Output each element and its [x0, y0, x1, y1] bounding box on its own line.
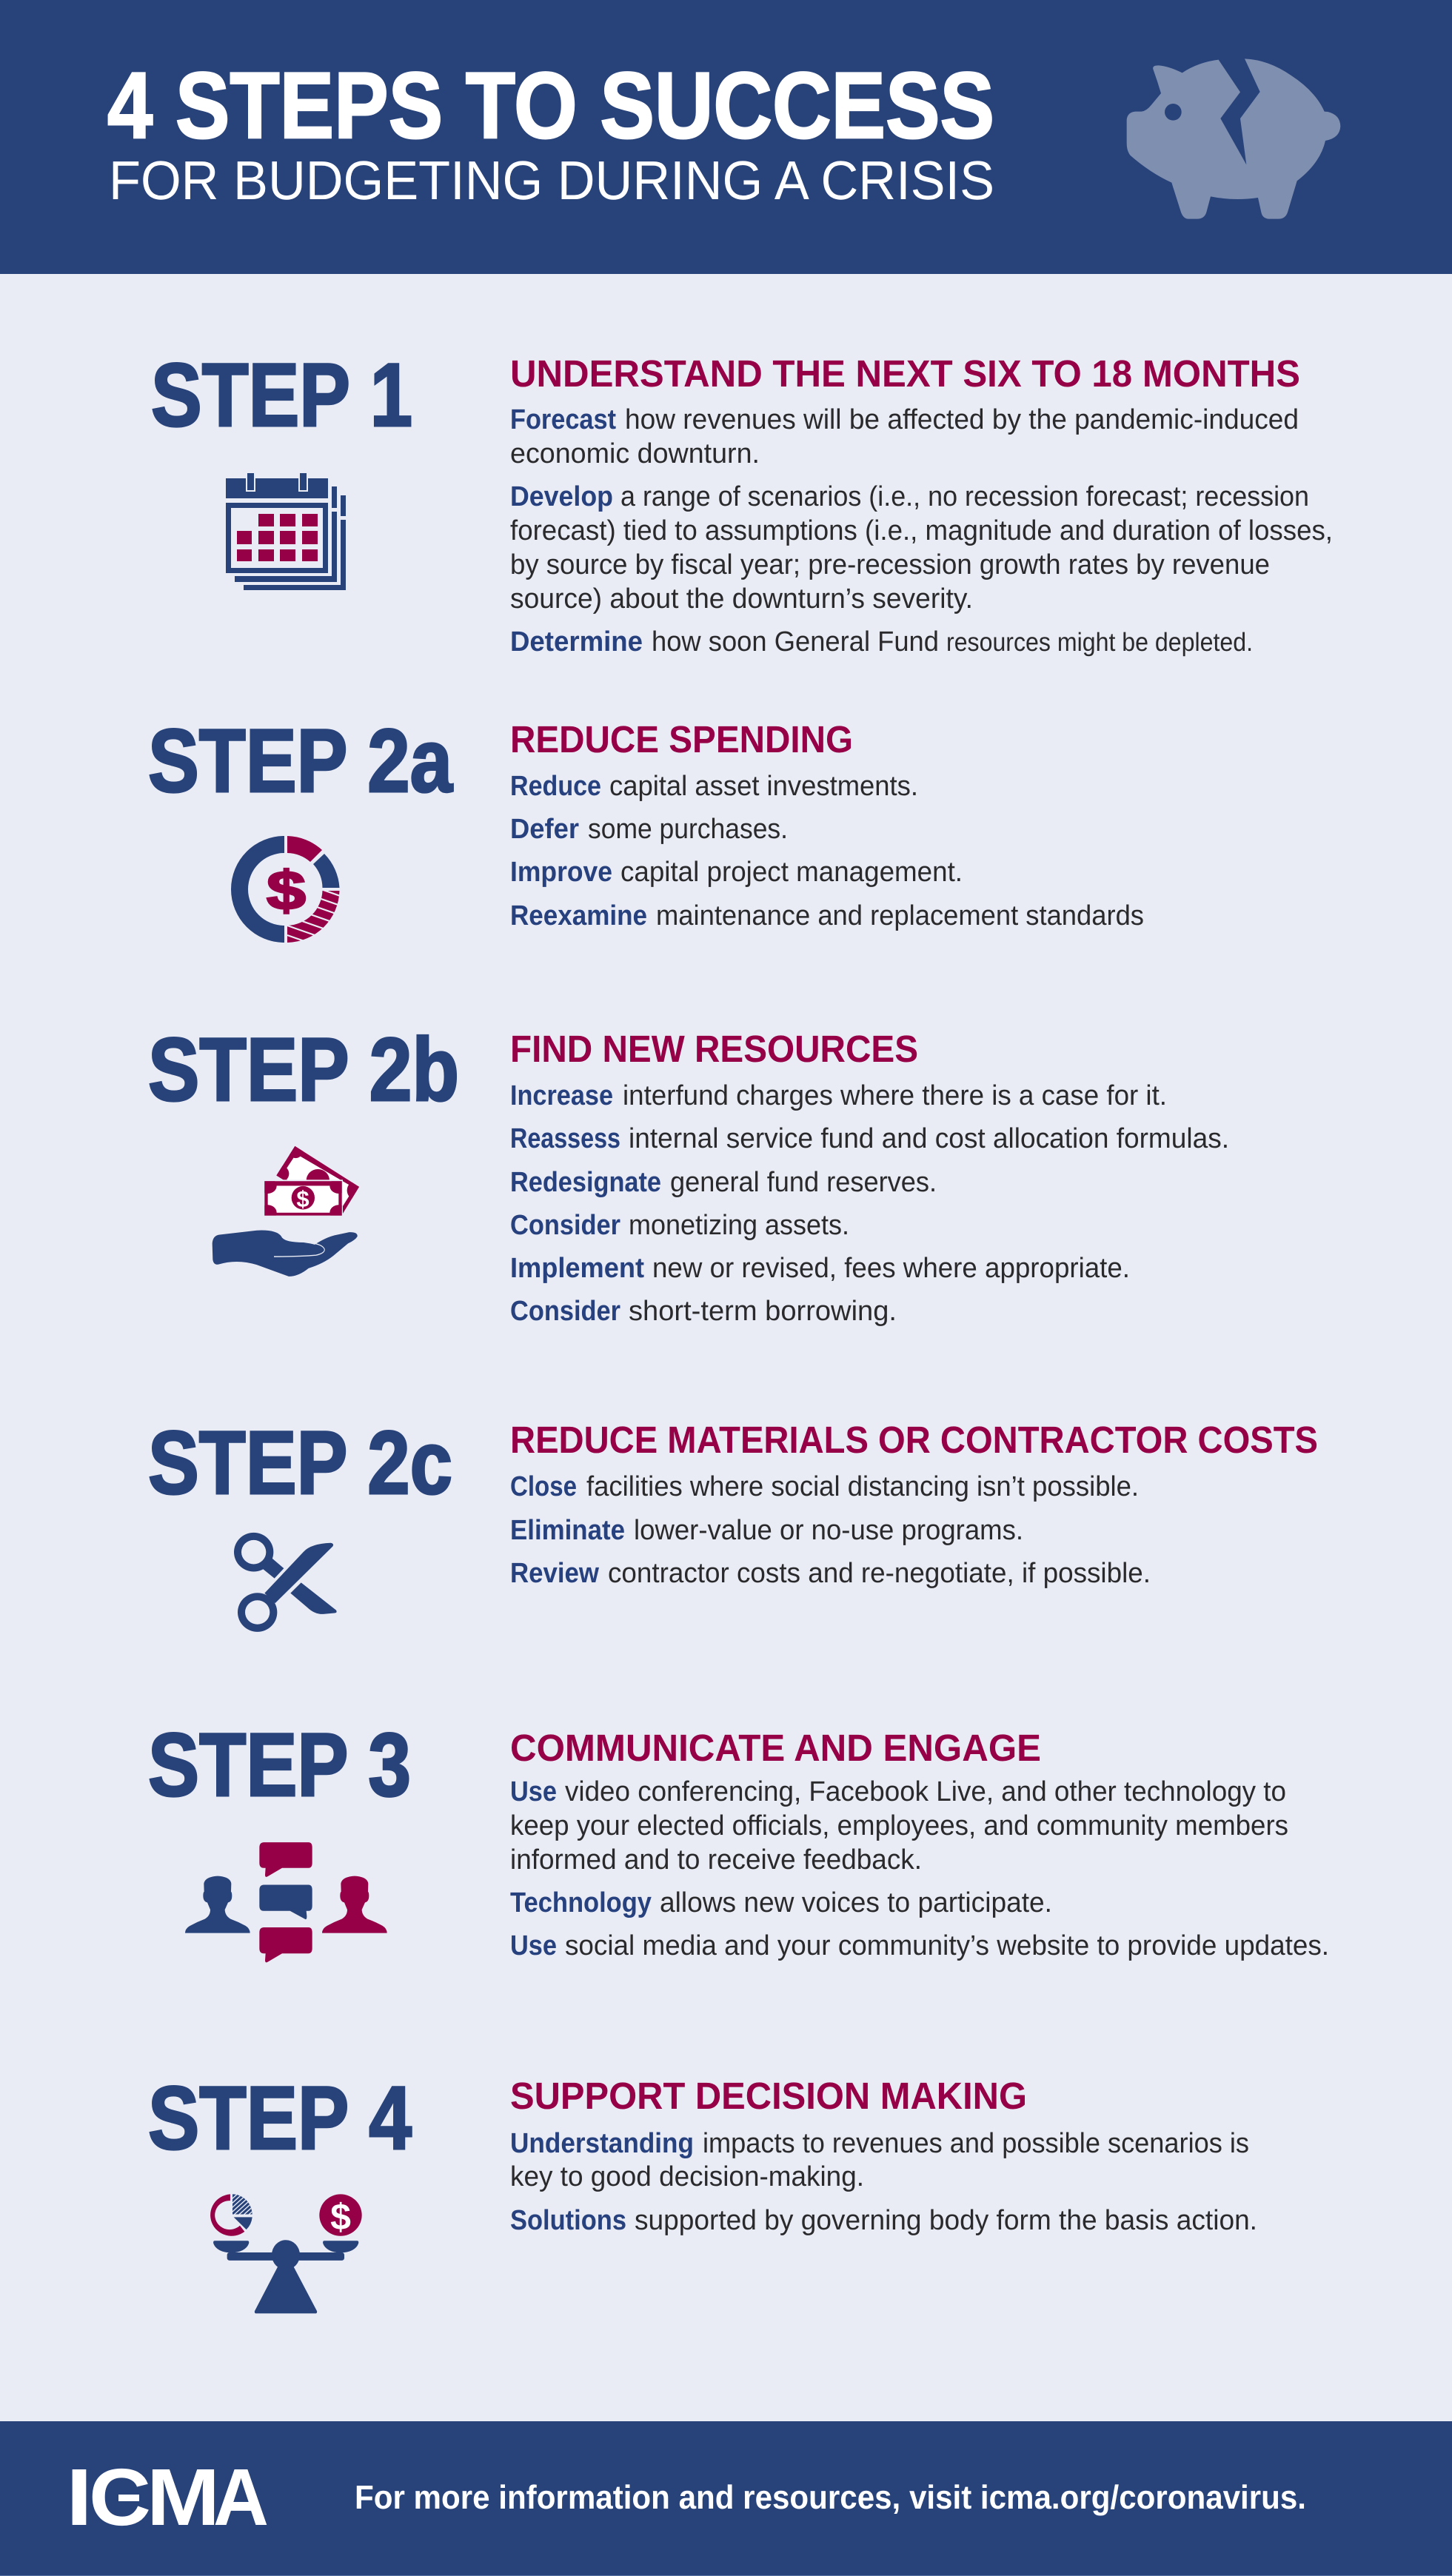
step 1 body text: by source by fiscal year; pre-recession growth rates by revenue — [510, 549, 1270, 581]
ICMA logo: I — [66, 2452, 93, 2543]
header banner — [0, 0, 1452, 274]
step 1 body text: resources might be depleted. — [946, 628, 1253, 657]
step 2b body text: Increase — [510, 1080, 613, 1111]
step 1 heading: UNDERSTAND THE NEXT SIX TO 18 MONTHS — [510, 352, 1300, 395]
panel: step 2c — [148, 1412, 1318, 1632]
step 2c body text: Close — [510, 1471, 577, 1502]
step 2b body text: internal service fund and cost allocation formulas. — [629, 1123, 1229, 1154]
step 2a body text — [510, 771, 1144, 931]
step 3 body text: Technology — [510, 1887, 652, 1918]
panel: step 2b — [148, 1019, 1229, 1327]
step 1 body text: how soon General Fund — [652, 626, 939, 658]
icon: dollar on scale: $ — [330, 2196, 351, 2238]
step 1 body text: Determine — [510, 626, 643, 658]
step 4 label: STEP 4 — [148, 2067, 412, 2168]
step 4 body text: Understanding — [510, 2128, 694, 2159]
step 2a body text: maintenance and replacement standards — [656, 900, 1144, 931]
step 4 body text: supported by governing body form the basis action. — [635, 2205, 1257, 2236]
icon: two people and speech bubbles — [185, 1842, 387, 1962]
step 2b body text: Consider — [510, 1296, 620, 1327]
step 2c body text: Eliminate — [510, 1515, 625, 1546]
step 2c body text — [510, 1471, 1151, 1589]
subtitle: FOR BUDGETING DURING A CRISIS — [109, 150, 994, 211]
icon: broken piggy bank — [1127, 58, 1340, 219]
step 1 body text: a range of scenarios (i.e., no recession forecast; recession — [620, 481, 1309, 512]
step 3 body text: informed and to receive feedback. — [510, 1844, 922, 1876]
step 4 body text: Solutions — [510, 2205, 626, 2236]
step 2b body text: Implement — [510, 1253, 644, 1284]
step 4 body text: impacts to revenues and possible scenarios is — [703, 2128, 1249, 2159]
step 1 body text: economic downturn. — [510, 438, 760, 469]
step 1 body text: source) about the downturn’s severity. — [510, 583, 973, 615]
step 2b body text: Consider — [510, 1210, 620, 1241]
icon: budget donut with dollar: $ — [267, 860, 306, 921]
step 2a body text: Reexamine — [510, 900, 647, 931]
step 2a body text: Reduce — [510, 771, 601, 802]
icon: balance scale — [210, 2181, 362, 2313]
step 2a body text: Defer — [510, 814, 579, 845]
step 2b body text: Reassess — [510, 1123, 620, 1154]
panel: step 4 — [148, 2067, 1257, 2313]
step 1 body text: forecast) tied to assumptions (i.e., magnitude and duration of losses, — [510, 515, 1333, 546]
step 2b heading: FIND NEW RESOURCES — [510, 1028, 918, 1070]
step 1 body text: how revenues will be affected by the pandemic-induced — [625, 404, 1299, 435]
step 3 body text: video conferencing, Facebook Live, and other technology to — [565, 1776, 1286, 1807]
step 2c body text: contractor costs and re-negotiate, if possible. — [608, 1558, 1151, 1589]
step 4 body text — [510, 2128, 1257, 2236]
icon: hand holding money — [213, 1140, 364, 1277]
icon: budget donut with dollar — [231, 836, 348, 957]
step 3 body text: keep your elected officials, employees, and community members — [510, 1810, 1288, 1841]
step 2b body text: Redesignate — [510, 1167, 661, 1198]
footer text: For more information and resources, visit icma.org/coronavirus. — [355, 2478, 1306, 2516]
step 3 label: STEP 3 — [148, 1714, 411, 1815]
step 1 body text: Forecast — [510, 404, 616, 435]
step 2c heading: REDUCE MATERIALS OR CONTRACTOR COSTS — [510, 1419, 1318, 1461]
step 2b body text: short-term borrowing. — [629, 1296, 897, 1327]
step 3 heading: COMMUNICATE AND ENGAGE — [510, 1727, 1041, 1769]
step 3 body text: allows new voices to participate. — [660, 1887, 1052, 1918]
step 4 body text: key to good decision-making. — [510, 2161, 864, 2192]
step 4 heading: SUPPORT DECISION MAKING — [510, 2075, 1027, 2117]
ICMA logo: C — [89, 2452, 151, 2543]
panel: step 3 — [148, 1714, 1329, 1962]
step 2b body text: new or revised, fees where appropriate. — [652, 1253, 1130, 1284]
step 1 body text — [510, 404, 1333, 658]
step 2c body text: Review — [510, 1558, 599, 1589]
step 2b body text: monetizing assets. — [629, 1210, 849, 1241]
step 2b body text — [510, 1080, 1229, 1327]
step 3 body text: social media and your community’s website to provide updates. — [565, 1930, 1329, 1961]
panel: step 2a — [148, 710, 1144, 957]
step 2c body text: facilities where social distancing isn’t possible. — [586, 1471, 1139, 1502]
footer banner — [0, 2421, 1452, 2576]
step 1 label: STEP 1 — [151, 344, 412, 445]
step 3 body text: Use — [510, 1776, 557, 1807]
step 3 body text: Use — [510, 1930, 557, 1961]
step 2b body text: interfund charges where there is a case for it. — [623, 1080, 1167, 1111]
ICMA logo: A — [213, 2452, 269, 2543]
icon: scissors — [234, 1533, 337, 1632]
step 2a label: STEP 2a — [148, 710, 453, 811]
step 3 body text — [510, 1776, 1329, 1961]
panel: step 1 — [151, 344, 1333, 658]
step 2b label: STEP 2b — [148, 1019, 459, 1120]
step 2c body text: lower-value or no-use programs. — [634, 1515, 1023, 1546]
step 2c label: STEP 2c — [148, 1412, 452, 1513]
step 2a body text: capital asset investments. — [609, 771, 918, 802]
icon: dollar on bill: $ — [296, 1186, 310, 1212]
ICMA logo — [66, 2452, 269, 2543]
title: 4 STEPS TO SUCCESS — [107, 53, 994, 158]
step 2a heading: REDUCE SPENDING — [510, 718, 853, 760]
step 2a body text: capital project management. — [620, 857, 963, 888]
ICMA logo: M — [147, 2452, 220, 2543]
step 2a body text: some purchases. — [588, 814, 788, 845]
step 2a body text: Improve — [510, 857, 612, 888]
step 2b body text: general fund reserves. — [670, 1167, 937, 1198]
icon: calendar pages — [226, 472, 346, 590]
step 1 body text: Develop — [510, 481, 613, 512]
